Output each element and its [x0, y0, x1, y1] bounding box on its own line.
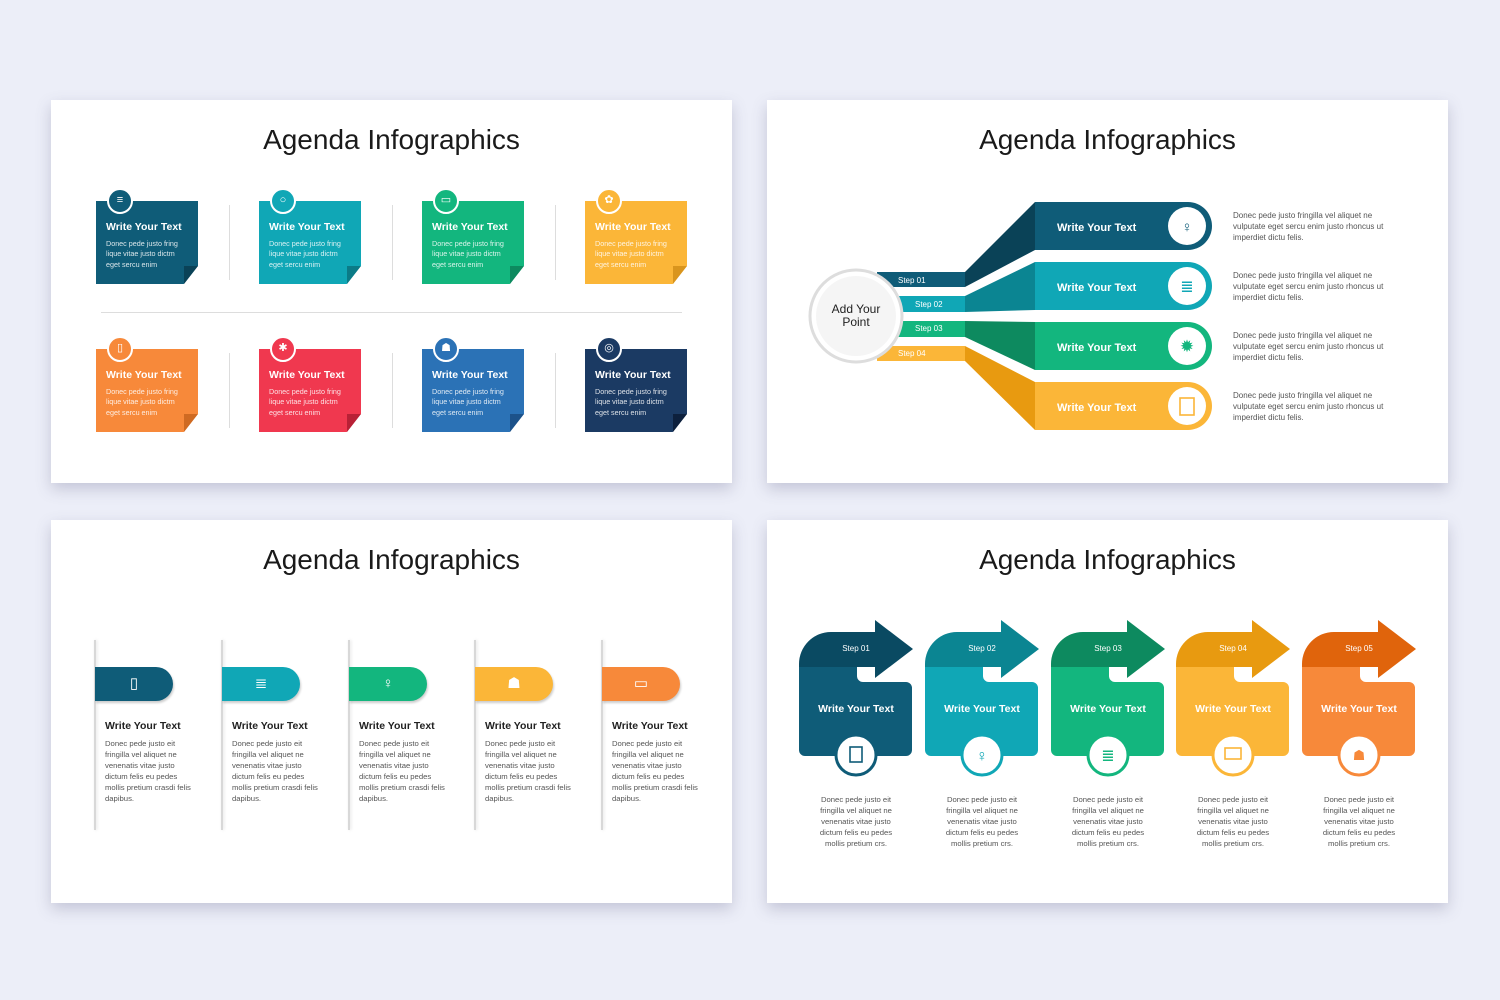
column 5	[601, 640, 698, 830]
panel: top-left sticky notes	[51, 100, 732, 483]
icons: ≡	[117, 194, 123, 206]
sticky note cards: ◎	[604, 342, 614, 354]
step card 1: Step 01	[842, 644, 870, 653]
center circle: Add Your	[832, 302, 880, 316]
column 1: Donec pede justo eit fringilla vel aliquet ne venenatis vitae justo dictum felis eu pedes mollis pretium crasdi felis dapibus.	[105, 739, 191, 803]
descriptions: vulputate eget sercu enim justo rhoncus ut	[1233, 282, 1384, 291]
card 3: Write Your Text	[432, 221, 508, 233]
step 1: Step 01	[898, 276, 926, 285]
card 4: eget sercu enim	[595, 260, 646, 269]
step descriptions: Donec pede justo eit fringilla vel aliquet ne venenatis vitae justo dictum felis eu pedes mollis pretium crs.	[1197, 795, 1269, 848]
column 5: ▭	[634, 675, 648, 692]
step 1	[877, 202, 1212, 287]
sticky note cards: ○	[280, 194, 286, 206]
card 1: eget sercu enim	[106, 260, 157, 269]
card 3: eget sercu enim	[432, 260, 483, 269]
card 7: lique vitae justo dictm	[432, 397, 501, 406]
step 3: ✹	[1180, 337, 1194, 356]
panel: bottom-left columns	[51, 520, 732, 903]
card 7: Write Your Text	[432, 369, 508, 381]
card 1: lique vitae justo dictm	[106, 249, 175, 258]
card 2: Donec pede justo fring	[269, 239, 341, 248]
card 4: Write Your Text	[595, 221, 671, 233]
card 6: eget sercu enim	[269, 408, 320, 417]
column 2: Write Your Text	[232, 720, 308, 732]
sticky note cards: ☗	[441, 342, 451, 354]
step card 5: Step 05	[1345, 644, 1373, 653]
card 8: eget sercu enim	[595, 408, 646, 417]
descriptions: imperdiet dictu felis.	[1233, 413, 1304, 422]
title: Agenda Infographics	[979, 544, 1236, 575]
title: Agenda Infographics	[263, 124, 520, 155]
card 3: lique vitae justo dictm	[432, 249, 501, 258]
title: Agenda Infographics	[263, 544, 520, 575]
column 3	[348, 640, 445, 830]
card 2	[259, 201, 361, 284]
card 5: Donec pede justo fring	[106, 387, 178, 396]
step descriptions: Donec pede justo eit fringilla vel aliquet ne venenatis vitae justo dictum felis eu pedes mollis pretium crs.	[1323, 795, 1395, 848]
step 2: Write Your Text	[1057, 282, 1137, 294]
sticky note cards: ✿	[604, 194, 614, 206]
step descriptions	[820, 795, 1395, 848]
step card 5: ☗	[1353, 747, 1365, 763]
title: Agenda Infographics	[979, 124, 1236, 155]
descriptions: vulputate eget sercu enim justo rhoncus ut	[1233, 402, 1384, 411]
descriptions	[1233, 211, 1384, 422]
descriptions: vulputate eget sercu enim justo rhoncus ut	[1233, 222, 1384, 231]
step card 4: Step 04	[1219, 644, 1247, 653]
card 6: Write Your Text	[269, 369, 345, 381]
card 2: eget sercu enim	[269, 260, 320, 269]
center circle	[810, 270, 902, 362]
card 1: Donec pede justo fring	[106, 239, 178, 248]
descriptions: vulputate eget sercu enim justo rhoncus ut	[1233, 342, 1384, 351]
column 4: Write Your Text	[485, 720, 561, 732]
column 1: ▯	[130, 675, 138, 692]
step card 4: Write Your Text	[1195, 703, 1271, 715]
step 3	[877, 321, 1212, 370]
panel: bottom-right arrow steps	[767, 520, 1448, 903]
card 8	[585, 349, 687, 432]
column 4	[474, 640, 571, 830]
center circle: Point	[842, 315, 870, 329]
sticky note cards: ▯	[117, 342, 123, 354]
step card 2	[925, 620, 1039, 775]
card 8: lique vitae justo dictm	[595, 397, 664, 406]
step card 4	[1176, 620, 1290, 775]
card 5: eget sercu enim	[106, 408, 157, 417]
descriptions: imperdiet dictu felis.	[1233, 233, 1304, 242]
step card 2: Step 02	[968, 644, 996, 653]
step card 2: ♀	[976, 748, 988, 765]
step descriptions: Donec pede justo eit fringilla vel aliquet ne venenatis vitae justo dictum felis eu pedes mollis pretium crs.	[946, 795, 1018, 848]
step 4	[877, 346, 1212, 430]
card 8: Donec pede justo fring	[595, 387, 667, 396]
card 6	[259, 349, 361, 432]
column 2: ≣	[255, 675, 267, 692]
step descriptions: Donec pede justo eit fringilla vel aliquet ne venenatis vitae justo dictum felis eu pedes mollis pretium crs.	[1072, 795, 1144, 848]
step 2: Step 02	[915, 300, 943, 309]
sticky note cards: ✱	[278, 342, 288, 354]
descriptions: imperdiet dictu felis.	[1233, 353, 1304, 362]
card 5: Write Your Text	[106, 369, 182, 381]
step card 1	[799, 620, 913, 775]
card 5	[96, 349, 198, 432]
column 3: Donec pede justo eit fringilla vel aliquet ne venenatis vitae justo dictum felis eu pedes mollis pretium crasdi felis dapibus.	[359, 739, 445, 803]
column 3: ♀	[382, 675, 394, 692]
column 2	[221, 640, 318, 830]
arrow step cards	[799, 620, 1416, 776]
panel: top-right steps fan	[767, 100, 1448, 483]
column 3: Write Your Text	[359, 720, 435, 732]
card 3	[422, 201, 524, 284]
step card 3: Write Your Text	[1070, 703, 1146, 715]
card 2: Write Your Text	[269, 221, 345, 233]
step card 1: Write Your Text	[818, 703, 894, 715]
step card 2: Write Your Text	[944, 703, 1020, 715]
column 4: ☗	[507, 675, 521, 692]
card 8: Write Your Text	[595, 369, 671, 381]
card 7: Donec pede justo fring	[432, 387, 504, 396]
column 5: Write Your Text	[612, 720, 688, 732]
card 6: Donec pede justo fring	[269, 387, 341, 396]
column 4: Donec pede justo eit fringilla vel aliquet ne venenatis vitae justo dictum felis eu pedes mollis pretium crasdi felis dapibus.	[485, 739, 571, 803]
column 5: Donec pede justo eit fringilla vel aliquet ne venenatis vitae justo dictum felis eu pedes mollis pretium crasdi felis dapibus.	[612, 739, 698, 803]
step 4: Write Your Text	[1057, 402, 1137, 414]
step card 3: Step 03	[1094, 644, 1122, 653]
descriptions: Donec pede justo fringilla vel aliquet ne	[1233, 331, 1373, 340]
card 5: lique vitae justo dictm	[106, 397, 175, 406]
sticky note cards: ▭	[441, 194, 451, 206]
card 1: Write Your Text	[106, 221, 182, 233]
card 4	[585, 201, 687, 284]
card 2: lique vitae justo dictm	[269, 249, 338, 258]
card 4: Donec pede justo fring	[595, 239, 667, 248]
step 3: Write Your Text	[1057, 342, 1137, 354]
column 1	[94, 640, 191, 830]
card 7	[422, 349, 524, 432]
step descriptions: Donec pede justo eit fringilla vel aliquet ne venenatis vitae justo dictum felis eu pedes mollis pretium crs.	[820, 795, 892, 848]
step card 5	[1302, 620, 1416, 775]
column 2: Donec pede justo eit fringilla vel aliquet ne venenatis vitae justo dictum felis eu pedes mollis pretium crasdi felis dapibus.	[232, 739, 318, 803]
descriptions: Donec pede justo fringilla vel aliquet ne	[1233, 211, 1373, 220]
fan diagram	[808, 202, 1384, 430]
icons	[107, 188, 133, 214]
step 1: Write Your Text	[1057, 222, 1137, 234]
column 1: Write Your Text	[105, 720, 181, 732]
card 4: lique vitae justo dictm	[595, 249, 664, 258]
card 1	[96, 201, 198, 284]
step 3: Step 03	[915, 324, 943, 333]
step card 3	[1051, 620, 1165, 775]
card 7: eget sercu enim	[432, 408, 483, 417]
card 3: Donec pede justo fring	[432, 239, 504, 248]
descriptions: imperdiet dictu felis.	[1233, 293, 1304, 302]
descriptions: Donec pede justo fringilla vel aliquet ne	[1233, 391, 1373, 400]
step 1: ♀	[1181, 219, 1193, 236]
step card 5: Write Your Text	[1321, 703, 1397, 715]
sticky note cards	[96, 190, 687, 432]
step card 3: ≣	[1101, 748, 1115, 765]
step 2	[877, 262, 1212, 312]
card 6: lique vitae justo dictm	[269, 397, 338, 406]
step 4: Step 04	[898, 349, 926, 358]
descriptions: Donec pede justo fringilla vel aliquet ne	[1233, 271, 1373, 280]
step 2: ≣	[1180, 279, 1194, 296]
